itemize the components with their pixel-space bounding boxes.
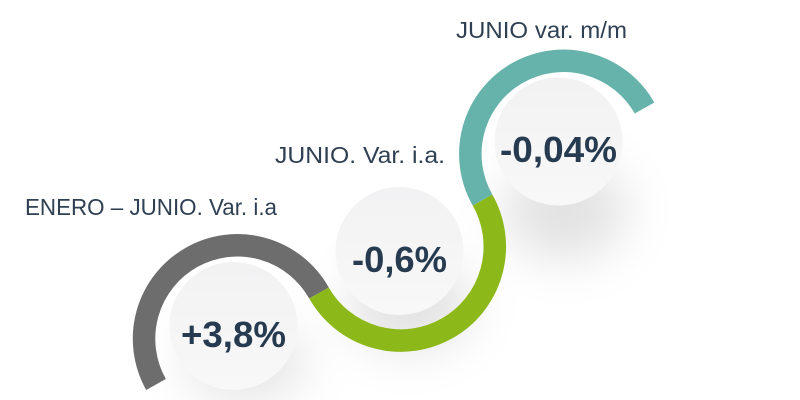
value: +3,8%: +3,8% [181,314,286,355]
label: JUNIO. Var. i.a.: JUNIO. Var. i.a. [275,142,445,168]
gray arc [144,245,319,384]
label: ENERO – JUNIO: ENERO – JUNIO. Var. i.a [25,194,278,220]
gray circle [170,262,298,390]
value: -0,04%: -0,04% [500,129,617,170]
teal arc [470,61,644,200]
label: JUNIO var. m/m: JUNIO var. m/m [456,17,627,43]
panel: junio interanual indicator [275,142,495,341]
green arc [319,200,495,341]
teal circle [494,78,622,206]
value: -0,6%: -0,6% [352,239,447,280]
panel: enero-junio indicator [25,194,319,390]
soft drop shadows [185,160,627,398]
green circle [336,187,464,315]
panel: junio mensual indicator [456,17,644,206]
